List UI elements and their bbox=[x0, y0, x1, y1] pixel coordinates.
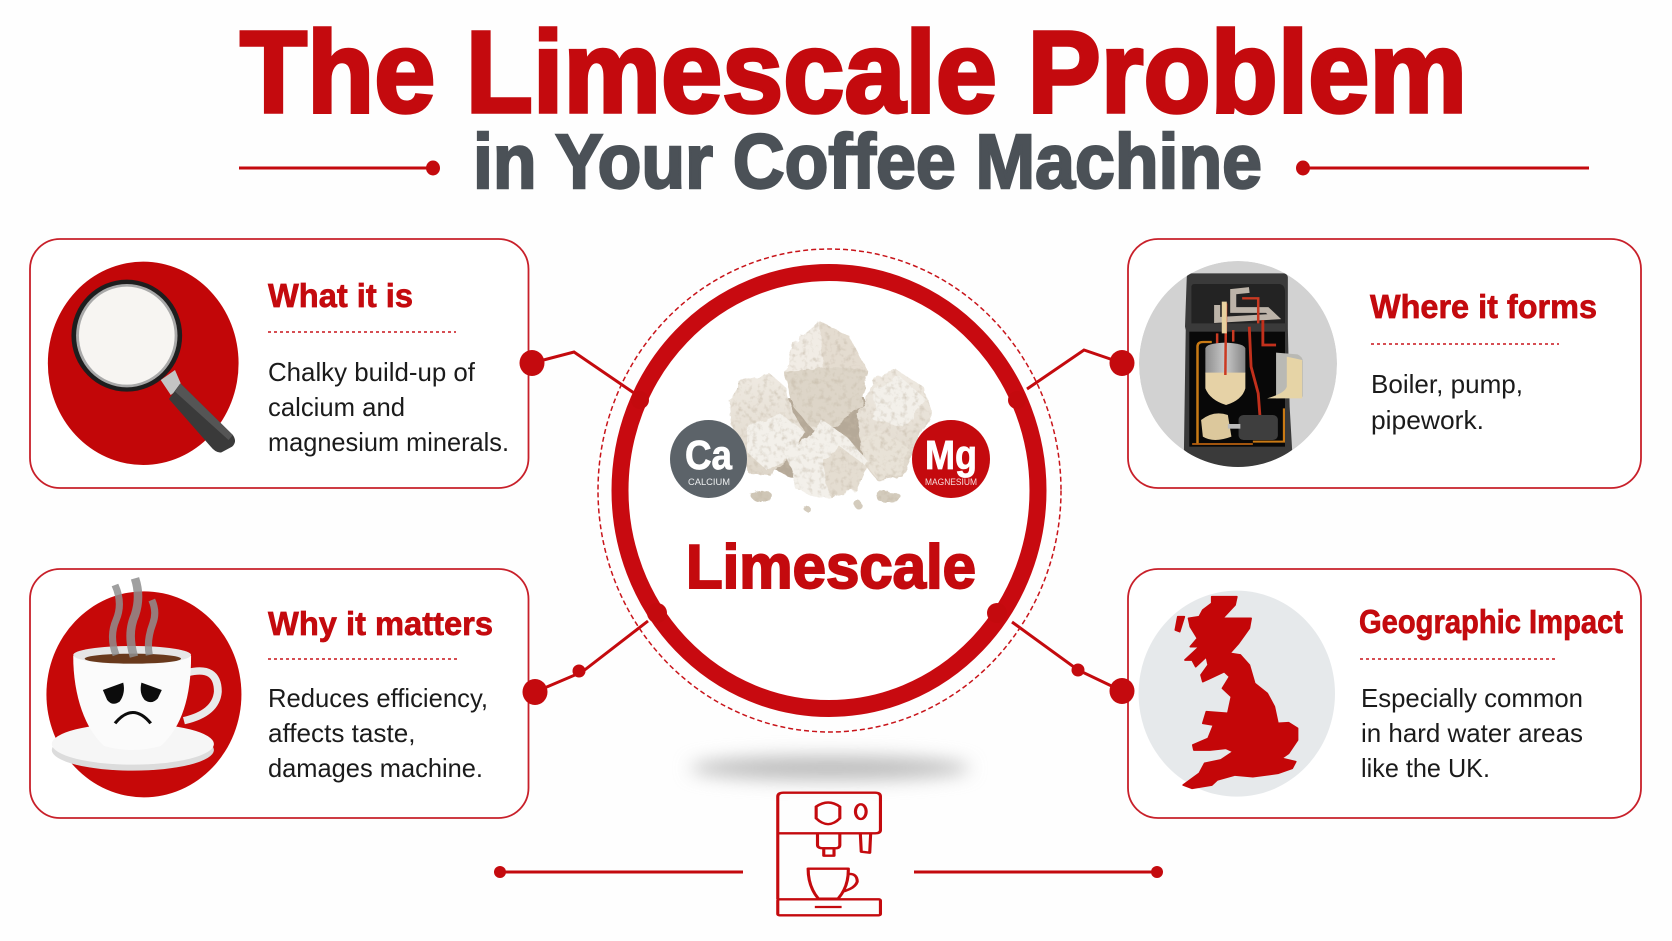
body text: Chalky build-up of bbox=[268, 357, 476, 387]
heading: What it is bbox=[268, 277, 413, 314]
connector: why it matters bbox=[522, 621, 648, 705]
body text: magnesium minerals. bbox=[268, 427, 509, 457]
body text: calcium and bbox=[268, 392, 405, 422]
connector: what it is bbox=[520, 350, 634, 393]
subtitle with side rules bbox=[239, 119, 1589, 205]
badge: calcium bbox=[670, 420, 747, 498]
central limescale circle bbox=[598, 249, 1061, 732]
heading: Why it matters bbox=[268, 605, 493, 642]
ground shadow bbox=[690, 756, 970, 780]
body text: in hard water areas bbox=[1361, 718, 1583, 748]
badge: magnesium: MAGNESIUM bbox=[925, 477, 977, 487]
icon: magnifying glass bbox=[48, 262, 239, 465]
panel: where it forms bbox=[1128, 239, 1641, 488]
badge: calcium: CALCIUM bbox=[688, 477, 730, 488]
badge: magnesium bbox=[912, 420, 990, 498]
icon: machine cutaway bbox=[1139, 261, 1337, 468]
body text bbox=[268, 683, 488, 783]
badge: magnesium: Mg bbox=[925, 432, 977, 478]
body text: Especially common bbox=[1361, 683, 1583, 713]
icon: coffee machine bbox=[778, 793, 880, 915]
heading: Geographic Impact bbox=[1359, 603, 1623, 640]
heading: Where it forms bbox=[1370, 288, 1597, 325]
panel: geographic impact bbox=[1128, 569, 1641, 818]
body text: Boiler, pump, bbox=[1371, 369, 1523, 399]
panel: what it is bbox=[30, 239, 528, 488]
title: The Limescale Problem bbox=[240, 7, 1467, 137]
icon: sad coffee cup bbox=[46, 578, 241, 797]
badge: calcium: Ca bbox=[685, 432, 733, 478]
body text: damages machine. bbox=[268, 753, 483, 783]
footer rule right bbox=[914, 866, 1163, 878]
body text: pipework. bbox=[1371, 405, 1484, 435]
panel: why it matters bbox=[30, 569, 528, 818]
subtitle with side rules: in Your Coffee Machine bbox=[473, 119, 1262, 205]
label: limescale: Limescale bbox=[686, 533, 976, 602]
body text bbox=[1371, 369, 1523, 435]
connector: geographic impact bbox=[1012, 622, 1134, 704]
icon: UK map bbox=[1139, 591, 1335, 797]
footer rule left bbox=[494, 866, 743, 878]
body text: like the UK. bbox=[1361, 753, 1490, 783]
body text bbox=[1361, 683, 1583, 783]
body text bbox=[268, 357, 509, 457]
body text: Reduces efficiency, bbox=[268, 683, 488, 713]
illustration: limescale rocks bbox=[728, 322, 932, 511]
connector: where it forms bbox=[1027, 350, 1134, 389]
body text: affects taste, bbox=[268, 718, 416, 748]
